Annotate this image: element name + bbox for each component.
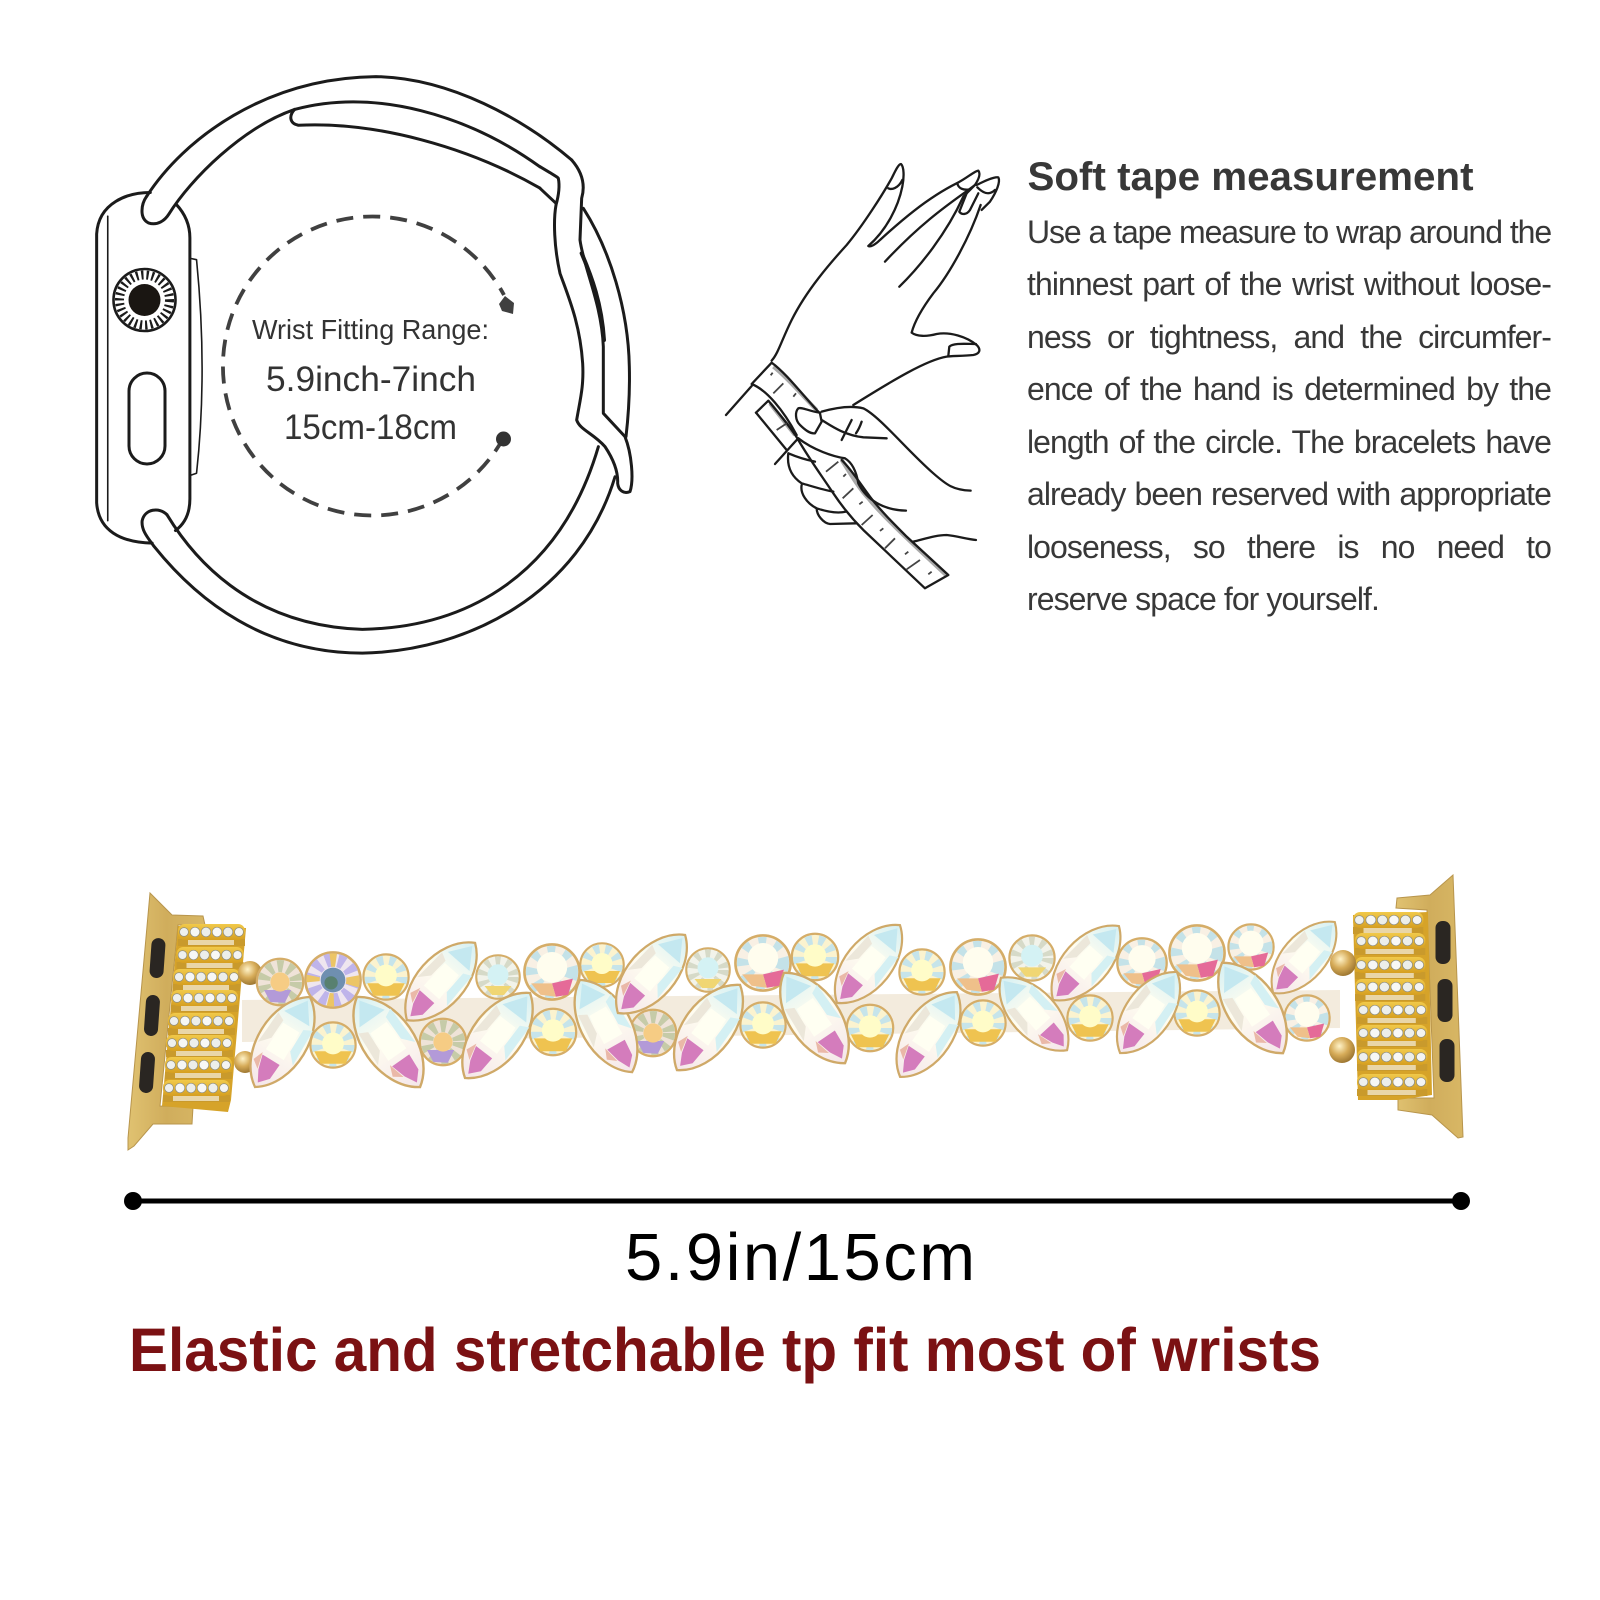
- icon: digital crown: [114, 269, 176, 331]
- marquise crystals: [234, 908, 1351, 1102]
- text: wrist fitting range: 5.9inch-7inch: [266, 360, 476, 399]
- text block: tape instructions: length of the circle. The bracelets have: [1027, 424, 1551, 460]
- left connector: [128, 893, 262, 1150]
- illustration: hands with soft tape: [726, 164, 999, 588]
- text block: tape instructions: [1027, 214, 1551, 617]
- text block: tape instructions: Use a tape measure to wrap around the: [1027, 214, 1551, 250]
- length label: 5.9in/15cm: [625, 1220, 975, 1295]
- text block: tape instructions: ness or tightness, and the circumfer-: [1027, 318, 1551, 354]
- text block: tape instructions: reserve space for yourself.: [1027, 581, 1379, 617]
- panel: watch fitting diagram: [97, 77, 632, 653]
- heading: soft tape measurement: Soft tape measurement: [1028, 155, 1474, 199]
- icon: side button: [129, 373, 165, 464]
- right connector: [1329, 875, 1463, 1138]
- text: wrist fitting range: [252, 314, 489, 447]
- text block: tape instructions: looseness, so there is no need to: [1027, 528, 1551, 564]
- round crystals: [257, 924, 1330, 1068]
- elastic strands: [242, 990, 1340, 1042]
- text: wrist fitting range: 15cm-18cm: [284, 408, 457, 447]
- text block: tape instructions: ence of the hand is determined by the: [1027, 371, 1551, 407]
- text: wrist fitting range: Wrist Fitting Range:: [252, 314, 489, 345]
- watch case and strap: [97, 77, 632, 653]
- bracelet photo illustration: [128, 875, 1463, 1150]
- dashed arrow loop: [223, 216, 514, 516]
- red caption: Elastic and stretchable tp fit most of wrists: [129, 1316, 1321, 1384]
- length measure bar: [124, 1192, 1470, 1210]
- text block: tape instructions: thinnest part of the wrist without loose-: [1027, 266, 1551, 302]
- text block: tape instructions: already been reserved with appropriate: [1027, 476, 1551, 512]
